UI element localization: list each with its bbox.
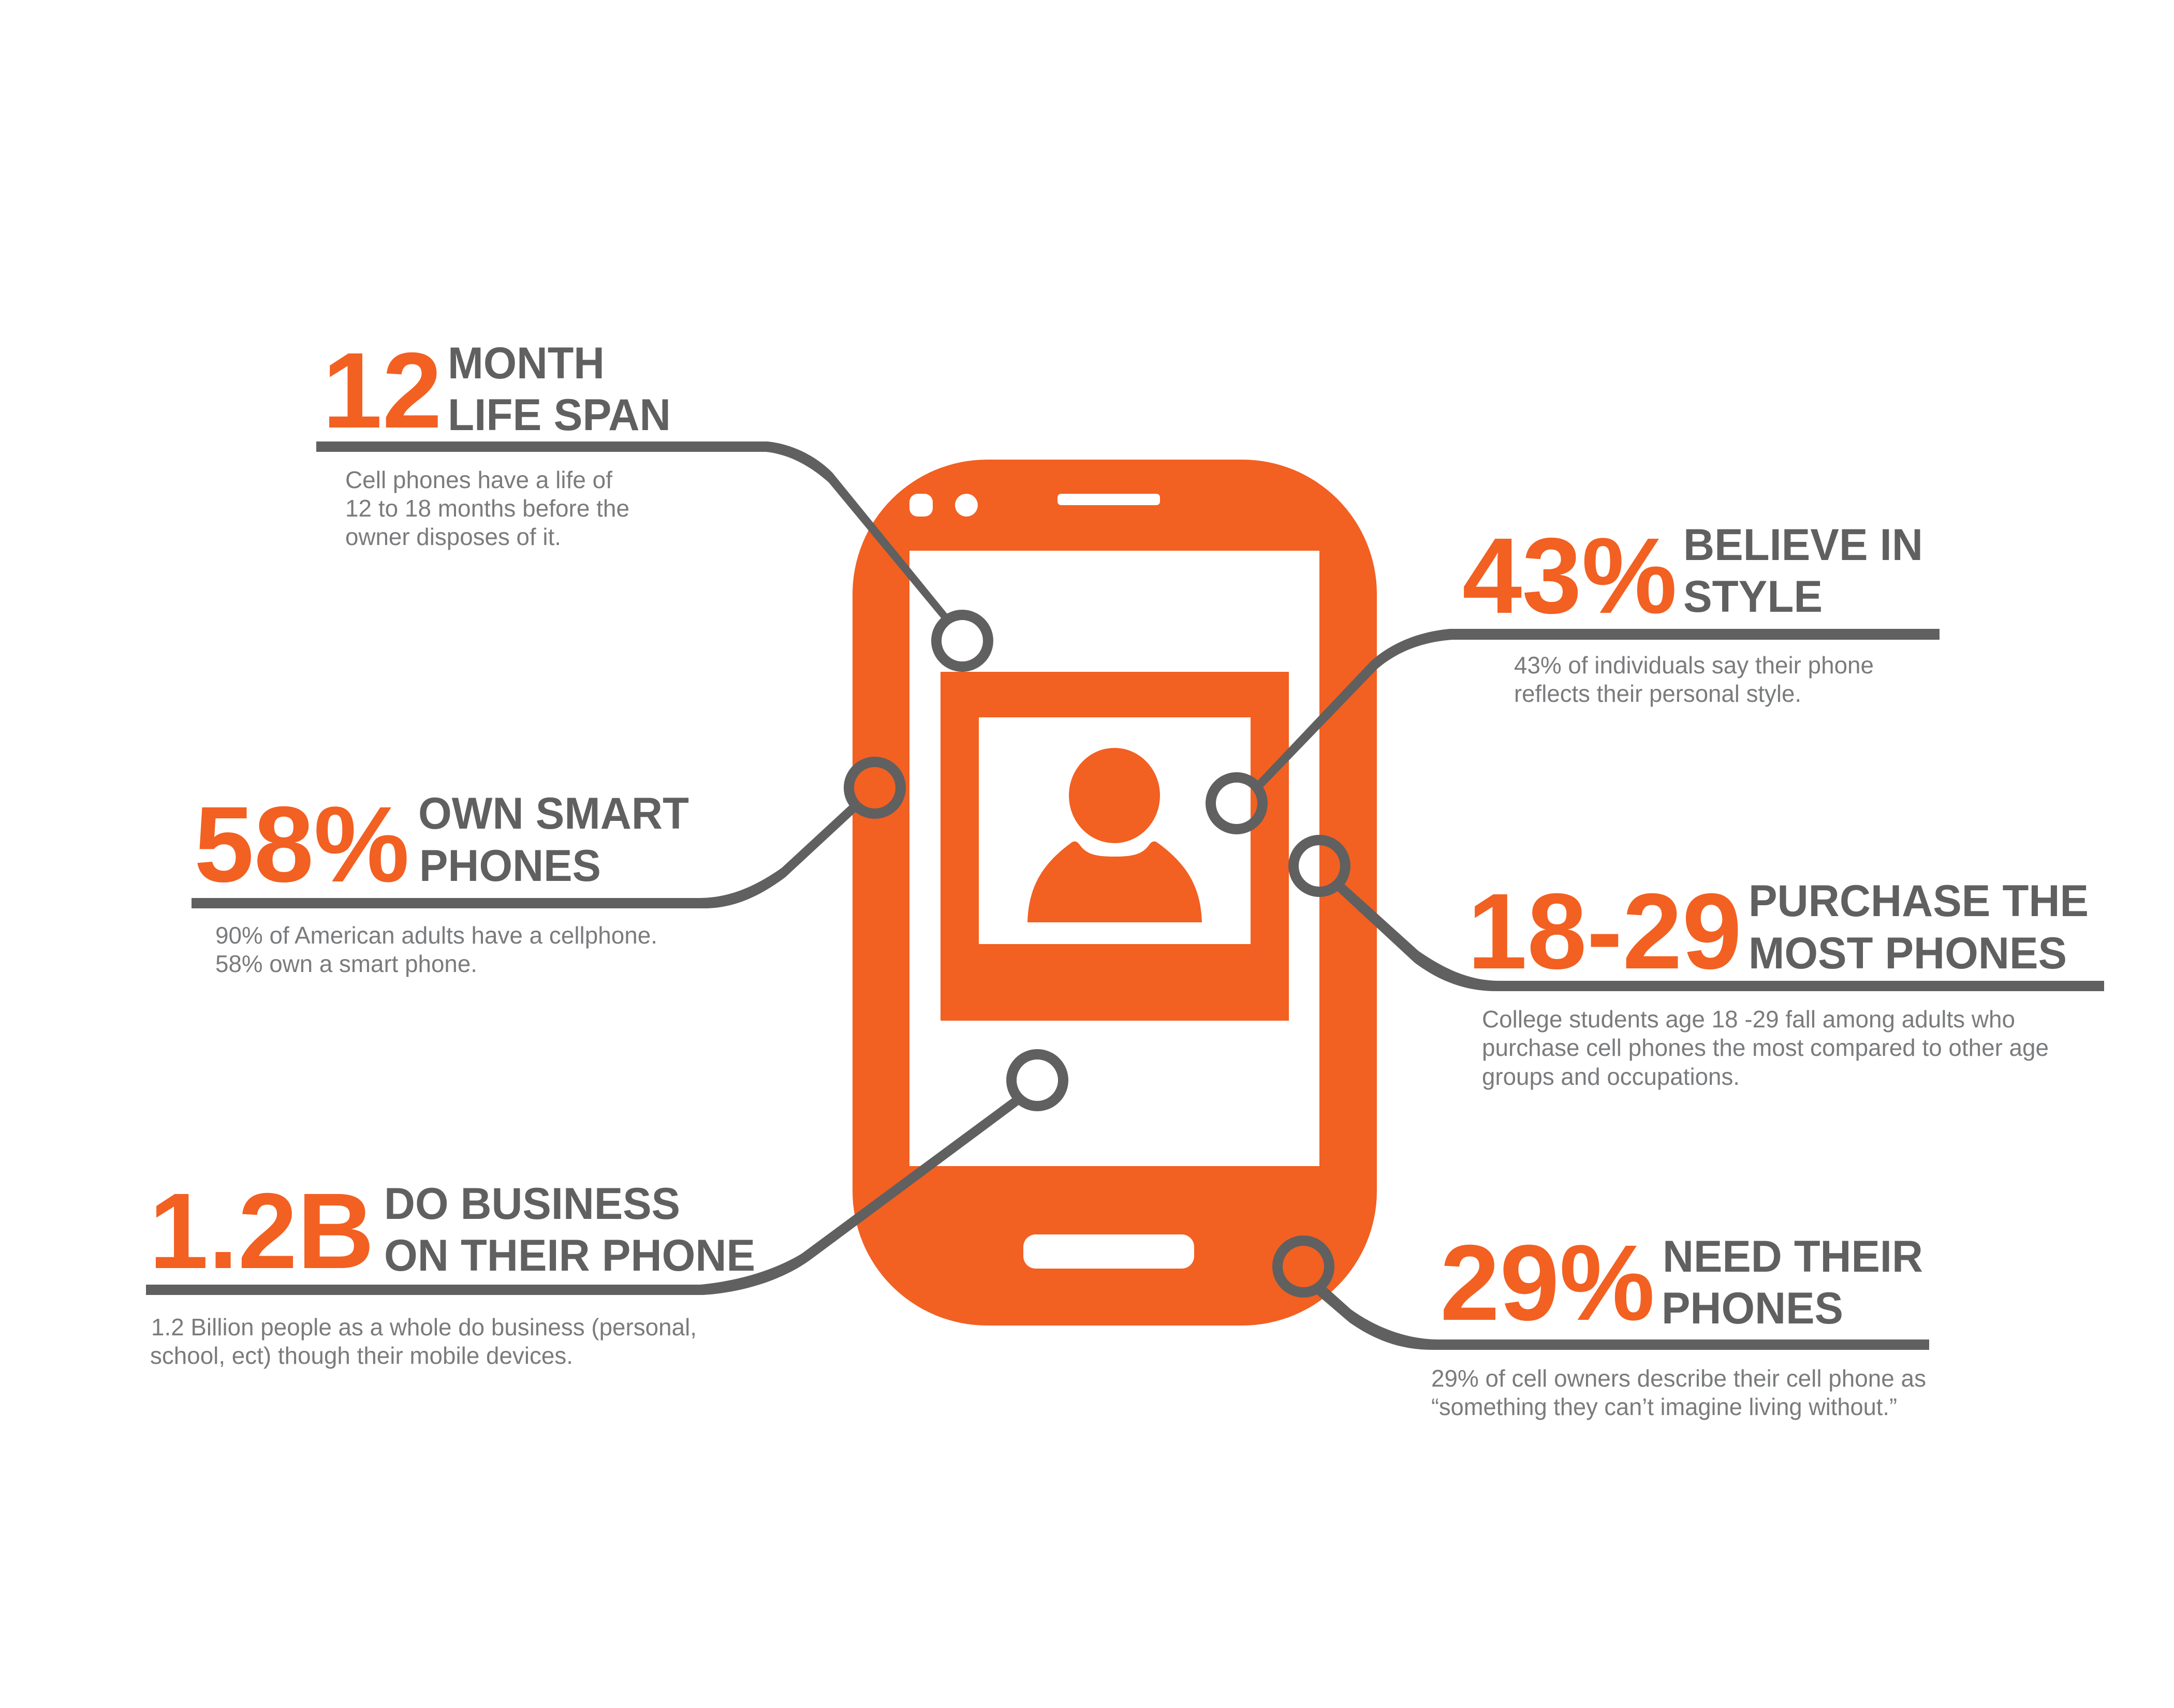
- heading: MOST PHONES: [1749, 929, 2067, 978]
- description: 43% of individuals say their phone: [1514, 652, 1874, 679]
- description: [150, 1314, 697, 1369]
- stat number: 58%: [194, 785, 409, 905]
- icon: smartphone: [853, 460, 1377, 1326]
- connector line: [1277, 1241, 1929, 1350]
- description: “something they can’t imagine living without.”: [1431, 1393, 1897, 1420]
- heading: OWN SMART: [418, 789, 689, 838]
- description: 58% own a smart phone.: [215, 950, 477, 977]
- heading: ON THEIR PHONE: [384, 1231, 755, 1280]
- heading: NEED THEIR: [1663, 1232, 1923, 1282]
- description: 29% of cell owners describe their cell phone as: [1431, 1365, 1926, 1392]
- description: 12 to 18 months before the: [345, 495, 629, 522]
- connector line: [192, 762, 901, 908]
- camera dot left: [909, 494, 933, 517]
- heading: PHONES: [419, 841, 601, 891]
- heading: PHONES: [1662, 1284, 1843, 1333]
- heading: PURCHASE THE: [1749, 876, 2089, 926]
- phone screen: [909, 551, 1319, 1166]
- description: owner disposes of it.: [345, 523, 561, 550]
- description: [1514, 652, 1874, 707]
- description: [1431, 1365, 1926, 1420]
- callout: 18-29 purchase the most phones: [1294, 840, 2104, 1090]
- description: [345, 466, 629, 550]
- speaker slot: [1057, 494, 1160, 505]
- heading: MONTH: [448, 338, 605, 388]
- stat number: 18-29: [1467, 872, 1742, 992]
- callout: 58% own smart phones: [192, 762, 901, 977]
- stat number: 29%: [1440, 1223, 1655, 1343]
- description: 90% of American adults have a cellphone.: [215, 922, 657, 949]
- heading: [448, 338, 671, 440]
- stat number: 43%: [1462, 516, 1677, 636]
- description: College students age 18 -29 fall among adults who: [1482, 1006, 2015, 1033]
- heading: LIFE SPAN: [448, 390, 671, 440]
- connector line: [1211, 629, 1940, 829]
- heading: [1662, 1232, 1923, 1333]
- photo inner: [979, 717, 1251, 944]
- description: reflects their personal style.: [1514, 680, 1801, 707]
- photo frame: [941, 672, 1289, 1021]
- connector line: [146, 1054, 1063, 1295]
- connector line: [1294, 840, 2104, 991]
- description: [1482, 1006, 2049, 1090]
- phone body: [853, 460, 1377, 1326]
- heading: [418, 789, 689, 891]
- connector line: [316, 441, 988, 667]
- description: 1.2 Billion people as a whole do business (personal,: [151, 1314, 697, 1341]
- heading: [1683, 520, 1923, 622]
- camera dot right: [955, 494, 978, 517]
- stat number: 12: [322, 331, 442, 451]
- description: purchase cell phones the most compared to other age: [1482, 1034, 2049, 1061]
- heading: [1749, 876, 2089, 978]
- callout: 1.2B do business on their phone: [146, 1054, 1063, 1369]
- heading: [384, 1179, 755, 1280]
- description: groups and occupations.: [1482, 1063, 1740, 1090]
- home button: [1023, 1234, 1194, 1269]
- description: school, ect) though their mobile devices.: [150, 1342, 573, 1369]
- heading: DO BUSINESS: [384, 1179, 680, 1229]
- callout: 12 month life span: [316, 331, 988, 667]
- heading: BELIEVE IN: [1683, 520, 1923, 570]
- callout: 29% need their phones: [1277, 1223, 1929, 1420]
- callout: 43% believe in style: [1211, 516, 1940, 829]
- description: Cell phones have a life of: [345, 466, 612, 493]
- stat number: 1.2B: [149, 1171, 374, 1291]
- heading: STYLE: [1683, 572, 1823, 622]
- icon: person: [1027, 748, 1202, 922]
- description: [215, 922, 657, 977]
